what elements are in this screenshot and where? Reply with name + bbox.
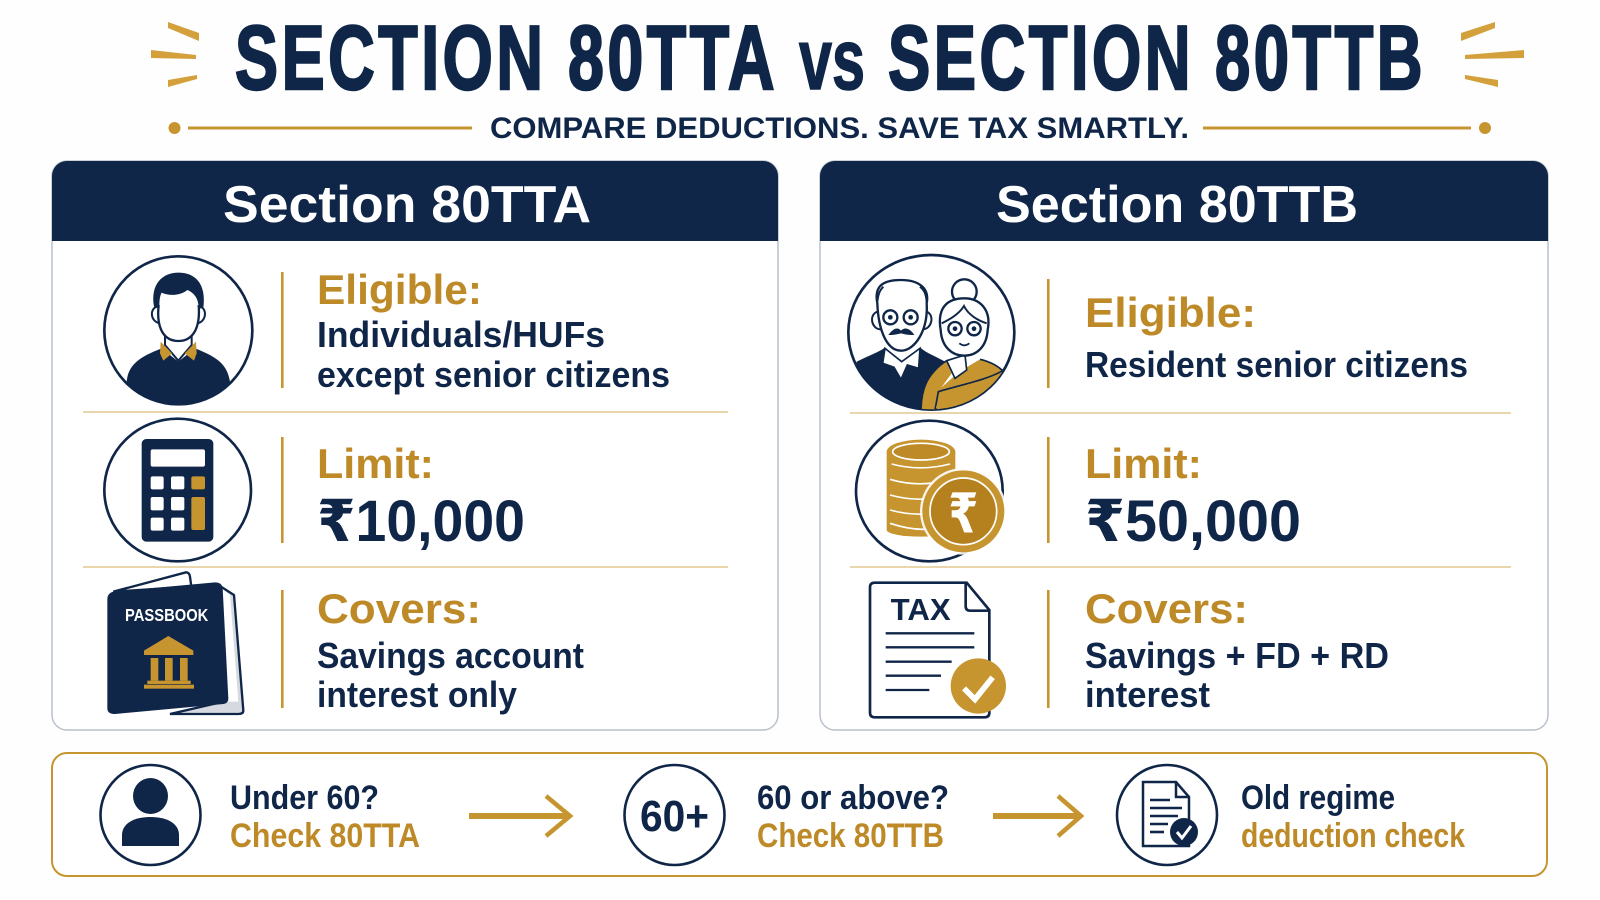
subtitle with rules: COMPARE DEDUCTIONS. SAVE TAX SMARTLY. bbox=[490, 112, 1189, 145]
icon: calculator bbox=[104, 419, 251, 561]
text: under 60 bbox=[230, 779, 420, 855]
title: vs bbox=[799, 12, 865, 108]
icon: right sparkle burst bbox=[1461, 22, 1524, 87]
heading: Section 80TTB: Section 80TTB bbox=[996, 176, 1358, 234]
text: eligible: Individuals/HUFs bbox=[317, 314, 605, 355]
icon: senior couple bbox=[848, 255, 1014, 412]
text: eligible: Resident senior citizens bbox=[1085, 344, 1468, 385]
subtitle with rules bbox=[168, 112, 1491, 145]
text: covers: interest only bbox=[317, 674, 517, 715]
text: limit bbox=[1085, 440, 1301, 554]
text: limit: Limit: bbox=[317, 440, 434, 487]
icon: left sparkle burst bbox=[151, 22, 199, 87]
text: covers: Covers: bbox=[317, 585, 481, 632]
icon: tax document: TAX bbox=[891, 593, 951, 627]
text: 60 or above bbox=[757, 779, 949, 855]
text: covers bbox=[1085, 585, 1389, 715]
text: eligible: except senior citizens bbox=[317, 354, 670, 395]
text: old regime: Old regime bbox=[1241, 779, 1395, 817]
panel: decision strip bbox=[52, 753, 1547, 876]
text: covers bbox=[317, 585, 584, 715]
text: limit: ₹50,000 bbox=[1085, 489, 1301, 554]
text: under 60: Check 80TTA bbox=[230, 817, 420, 855]
icon: 60+ badge: 60+ bbox=[640, 792, 709, 841]
text: limit: Limit: bbox=[1085, 440, 1202, 487]
arrow bbox=[469, 796, 570, 836]
icon: person bbox=[104, 256, 252, 407]
text: covers: interest bbox=[1085, 674, 1210, 715]
icon: 60+ badge bbox=[624, 765, 724, 865]
text: old regime bbox=[1241, 779, 1465, 855]
text: limit bbox=[317, 440, 525, 554]
panel: Section 80TTB bbox=[820, 161, 1548, 730]
text: covers: Covers: bbox=[1085, 585, 1248, 632]
arrow bbox=[993, 796, 1081, 836]
icon: tax document bbox=[870, 583, 1006, 717]
text: 60 or above: Check 80TTB bbox=[757, 817, 944, 855]
text: limit: ₹10,000 bbox=[317, 489, 525, 554]
icon: passbook: PASSBOOK bbox=[125, 605, 208, 625]
icon: rupee coins: ₹ bbox=[948, 482, 978, 544]
text: eligible bbox=[1085, 289, 1468, 385]
icon: under 60 user bbox=[100, 765, 200, 865]
text: old regime: deduction check bbox=[1241, 817, 1465, 855]
text: covers: Savings + FD + RD bbox=[1085, 635, 1389, 676]
title bbox=[235, 8, 1426, 109]
icon: document check bbox=[1117, 765, 1217, 865]
text: eligible: Eligible: bbox=[1085, 289, 1256, 336]
heading: Section 80TTA: Section 80TTA bbox=[223, 176, 591, 234]
icon: rupee coins bbox=[856, 421, 1007, 561]
title: SECTION 80TTA bbox=[235, 8, 778, 109]
text: covers: Savings account bbox=[317, 635, 584, 676]
text: 60 or above: 60 or above? bbox=[757, 779, 949, 817]
icon: passbook bbox=[107, 572, 243, 714]
text: under 60: Under 60? bbox=[230, 779, 379, 817]
text: eligible bbox=[317, 266, 670, 395]
divider bbox=[281, 272, 284, 388]
panel: Section 80TTA bbox=[52, 161, 778, 730]
text: eligible: Eligible: bbox=[317, 266, 482, 313]
